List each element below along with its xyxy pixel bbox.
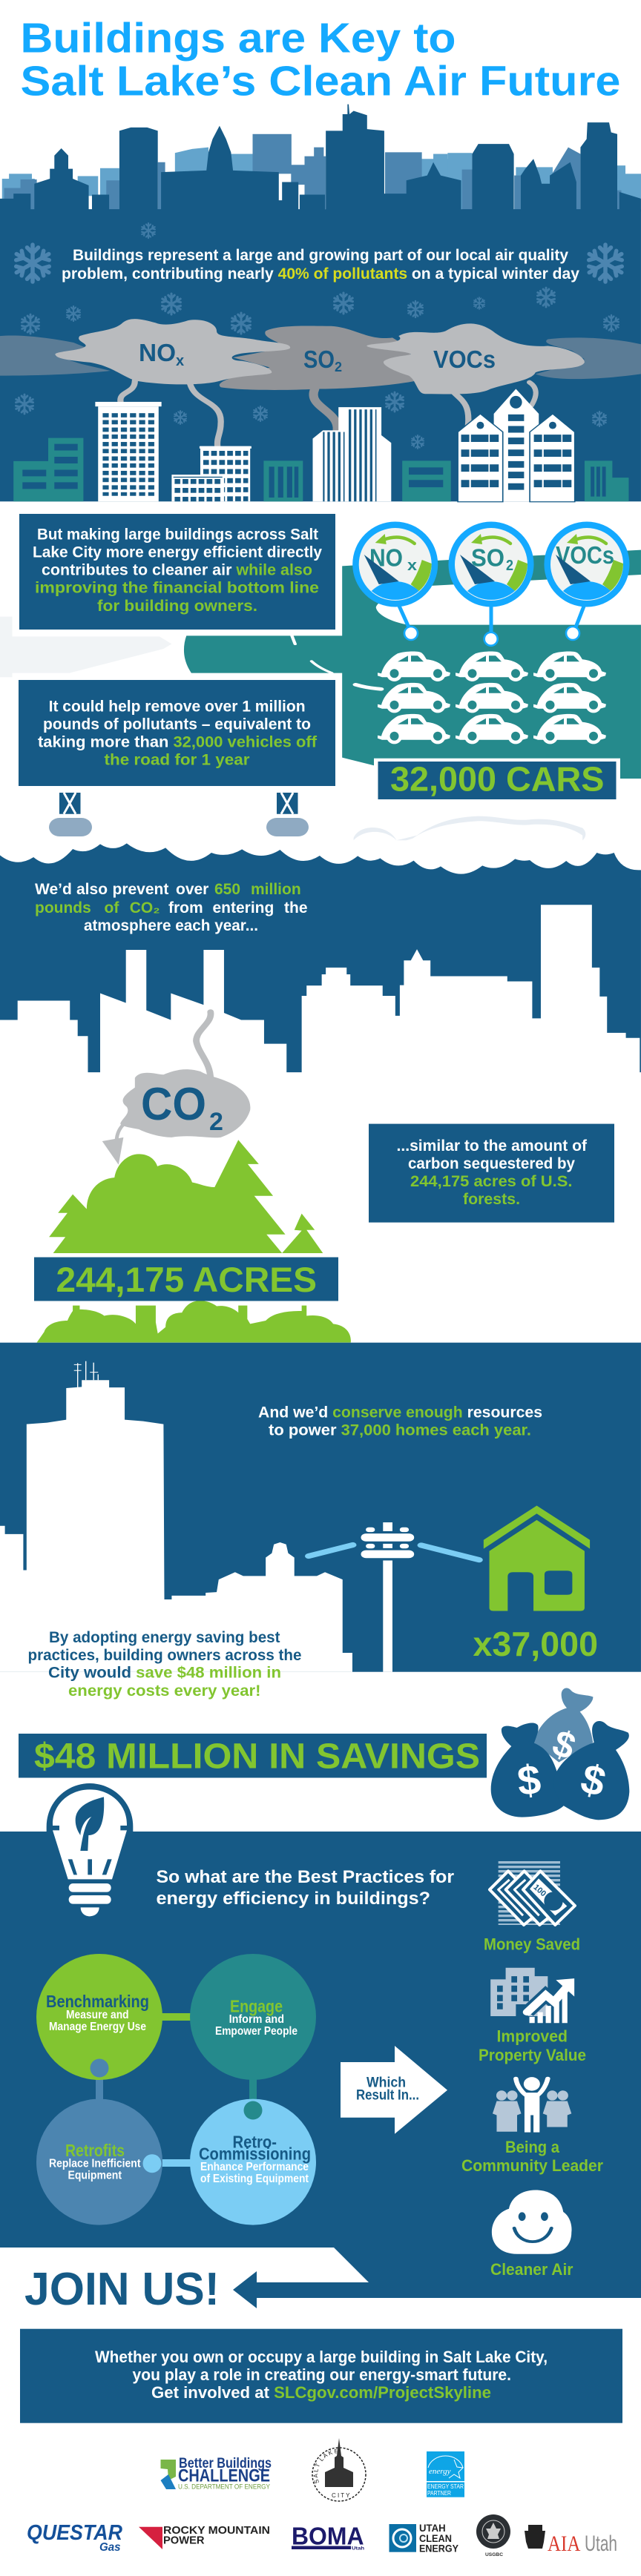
lower forest [37,1301,351,1343]
CO2 intro text: also [76,881,108,898]
circle: retro-commissioning: Retro- [233,2133,277,2152]
results labels: Money Saved [484,1935,580,1953]
icon: money bags: $ [548,1722,581,1768]
CO2 intro text: We’d [35,881,72,898]
CO2 intro text: over [176,881,208,898]
logo: Rocky Mountain Power [139,2524,270,2549]
billboard legs [49,793,309,836]
white front cloud [352,821,582,851]
text box: financial bottom line: for building owners. [97,598,257,615]
icon: community leader [493,2077,571,2133]
text box: pollutants removed: pounds of pollutants – equivalent to [43,716,311,733]
circle: engage: Engage [230,1996,283,2015]
arrow: which result in: Which [366,2075,406,2091]
panel: city skyline and smog [0,105,641,502]
faint cloud [354,816,585,840]
panel: conserve resources [0,1343,641,1700]
skyline: front dark buildings [0,105,641,212]
panel: call to action: Get involved at SLCgov.com/ProjectSkyline [151,2383,491,2402]
circle: engage: Empower People [215,2025,298,2038]
white tower left [95,402,162,501]
intro text: Buildings represent a large and growing part of our local air quality [73,247,568,264]
text box: pollutants removed [19,680,335,786]
heading: best practices question: energy efficiency in buildings? [156,1889,430,1909]
gauges: NO [369,544,403,571]
intro text [62,247,579,283]
logo: Questar Gas: Gas [99,2541,121,2554]
savings text: City would save $48 million in [48,1665,281,1682]
results labels: Being a [505,2138,560,2156]
dim side clouds [0,336,641,379]
power lines [309,1545,479,1560]
logo: Energy Star [427,2451,464,2497]
practices cycle [36,1954,316,2225]
circle: benchmarking: Manage Energy Use [49,2021,146,2033]
text box: carbon sequestered [369,1124,614,1223]
circle: retrofits [36,2099,162,2225]
logo: Salt Lake City seal: C I T Y [332,2492,350,2499]
title [21,15,620,105]
text box: financial bottom line: contributes to cleaner air while also [42,562,312,579]
panel: CO2 and forests [0,843,641,1343]
utility pole [361,1522,414,1672]
cloud labels: 2 [335,360,342,374]
CO2 label: 2 [209,1108,223,1136]
logo: Utah Clean Energy: CLEAN [419,2532,452,2544]
snowflakes [16,223,622,449]
logo: BOMA Utah: BOMA [292,2523,364,2550]
logo: Salt Lake City seal: S A L T L A K E [313,2448,338,2483]
logo: USGBC Utah: USGBC [485,2552,503,2557]
panel: call to action: you play a role in creating our energy-smart future. [132,2365,511,2384]
heading: join us: JOIN US! [24,2264,220,2315]
conserve text [258,1404,542,1439]
savings text: energy costs every year! [68,1682,261,1700]
panel: call to action: Whether you own or occupy a large building in Salt Lake City, [95,2348,548,2366]
title: Salt Lake’s Clean Air Future [21,58,620,105]
logo: Energy Star: ENERGY STAR [427,2483,464,2490]
text box: financial bottom line: improving the financial bottom line [35,579,319,596]
text box: pollutants removed: It could help remove over 1 million [49,698,306,715]
logo: Better Buildings Challenge: U.S. DEPARTMENT OF ENERGY [178,2483,270,2491]
CO2 intro text: prevent [113,881,168,898]
skyline: middle buildings [4,134,622,212]
logo: Rocky Mountain Power: POWER [163,2534,205,2547]
icon: money bags: $ [515,1756,543,1804]
cloud labels: VOCs [433,346,496,373]
CO2 intro text: CO₂ [130,899,160,917]
arrow: which result in: Result In... [356,2087,419,2103]
cloud labels: x [176,353,184,369]
banner: $48 million in savings: $48 MILLION IN SAVINGS [34,1737,480,1776]
circle: engage [190,1954,316,2080]
circle: retro-commissioning [190,2099,316,2225]
savings text: practices, building owners across the [28,1647,301,1664]
panel: call to action [20,2329,622,2423]
text box: carbon sequestered: carbon sequestered by [408,1155,575,1172]
circle: retro-commissioning: Commissioning [199,2144,311,2164]
CO2 intro text: from [168,899,203,917]
conserve text: And we’d conserve enough resources [258,1404,542,1421]
logo: AIA Utah: AIA [548,2532,581,2556]
skyline: back light buildings [2,148,641,210]
cloud labels: NO [139,339,176,366]
logo: Utah Clean Energy [389,2522,459,2554]
heading: best practices question [156,1867,454,1909]
text box: pollutants removed: taking more than 32,000 vehicles off [38,733,318,750]
arrow into forest [102,1124,123,1165]
icon: money saved [490,1861,575,1925]
connectors [96,2008,257,2167]
arrow: which result in [341,2046,447,2134]
icon: cleaner air cloud [492,2190,572,2254]
teal background buildings [13,438,628,501]
gauges: 2 [506,558,513,574]
intro text: problem, contributing nearly 40% of pollutants on a typical winter day [62,265,579,283]
CO2 intro text [35,881,307,934]
text box: carbon sequestered: forests. [463,1191,520,1208]
logo: BOMA Utah: Utah [352,2546,364,2551]
gauges: VOCs [556,541,614,569]
title: Buildings are Key to [21,15,456,62]
logo: Questar Gas: QUESTAR [27,2521,122,2545]
savings text: By adopting energy saving best [49,1629,280,1646]
CO2 intro text: atmosphere each year... [84,917,258,934]
white striped tower [313,407,391,501]
logo: Rocky Mountain Power: ROCKY MOUNTAIN [163,2524,270,2537]
circle: benchmarking [36,1954,162,2080]
text box: financial bottom line: But making large buildings across Salt [37,526,318,544]
conserve text: to power 37,000 homes each year. [269,1422,531,1439]
teal backdrop [184,550,641,779]
forest [49,1140,323,1253]
results labels: Cleaner Air [490,2260,573,2279]
CO2 intro text: entering [212,899,274,917]
circle: retro-commissioning: Enhance Performance [200,2161,309,2173]
CO2 intro text: million [251,881,301,898]
CO2 intro text: 650 [214,881,240,898]
x37,000 label: x37,000 [473,1625,598,1663]
circle: benchmarking: Benchmarking [46,1992,149,2011]
circle: retrofits: Equipment [68,2170,122,2182]
green house [484,1506,590,1611]
icon: money bags [491,1688,629,1820]
results labels [461,1935,603,2279]
results labels: Improved [497,2027,568,2045]
logo: Energy Star: PARTNER [427,2490,451,2497]
logo: Better Buildings Challenge: CHALLENGE [178,2466,270,2486]
text box: financial bottom line: Lake City more energy efficient directly [33,544,322,561]
CO2 cloud [120,1069,250,1137]
circle: engage: Inform and [229,2013,284,2026]
heading: best practices question: So what are the Best Practices for [156,1867,454,1887]
gauges: x [407,558,417,574]
244,175 acres label: 244,175 ACRES [56,1260,317,1299]
CO2 label: CO [141,1079,206,1130]
cloud labels [139,339,496,374]
icon: money bags: $ [576,1754,611,1806]
100 note label: 100 [531,1883,548,1898]
logo: Utah Clean Energy: ENERGY [419,2543,459,2554]
circle: benchmarking: Measure and [66,2009,129,2021]
circle: retrofits: Retrofits [65,2141,125,2160]
CO2 intro text: of [104,899,119,917]
results labels: Property Value [479,2046,586,2064]
cloud labels: SO [303,346,335,373]
logo: AIA Utah [525,2525,617,2556]
dark background with join arrow [0,1832,641,2308]
text box: carbon sequestered: ...similar to the amount of [396,1137,588,1155]
partner logos [27,2438,617,2557]
smoke plumes [120,380,536,446]
32,000 cars label: 32,000 CARS [390,760,604,799]
circle: retrofits: Replace Inefficient [49,2158,141,2170]
logo: AIA Utah: Utah [585,2532,617,2556]
NOx cloud [55,319,290,384]
logo: Utah Clean Energy: UTAH [419,2522,446,2534]
cars grid [378,651,606,744]
logo: Better Buildings Challenge [160,2456,272,2491]
panel: best practices [0,1783,641,2308]
text box: financial bottom line [19,514,335,630]
icon: property value [490,1968,574,2023]
white highlight ticks [292,635,381,689]
logo: Energy Star: energy [429,2467,451,2476]
text box: pollutants removed: the road for 1 year [104,752,249,769]
white gabled buildings [458,389,575,502]
gauges: SO [471,544,504,571]
text box: carbon sequestered: 244,175 acres of U.S. [410,1173,573,1190]
smoke trail [196,1012,211,1080]
white city buildings [0,1361,352,1672]
CO2 intro text: pounds [35,899,91,917]
VOCs cloud [366,323,585,394]
scalloped dark background [0,843,641,890]
background band [0,209,641,501]
panel: cleaner air and cars [0,514,641,851]
white skyline [0,905,641,1078]
circle: retro-commissioning: of Existing Equipment [200,2173,309,2185]
icon: light bulb with leaf [47,1783,133,1916]
gauges [352,522,629,646]
results labels: Community Leader [461,2156,603,2175]
CO2 intro text: the [284,899,307,917]
logo: Salt Lake City seal [312,2438,366,2502]
white low-rise buildings [171,446,252,501]
logo: USGBC Utah [476,2514,510,2557]
savings text [28,1629,301,1700]
logo: Better Buildings Challenge: Better Buildings [179,2456,272,2471]
SO2 cloud [220,326,417,390]
logo: Questar Gas [27,2521,122,2554]
pale left backdrop [0,617,171,677]
